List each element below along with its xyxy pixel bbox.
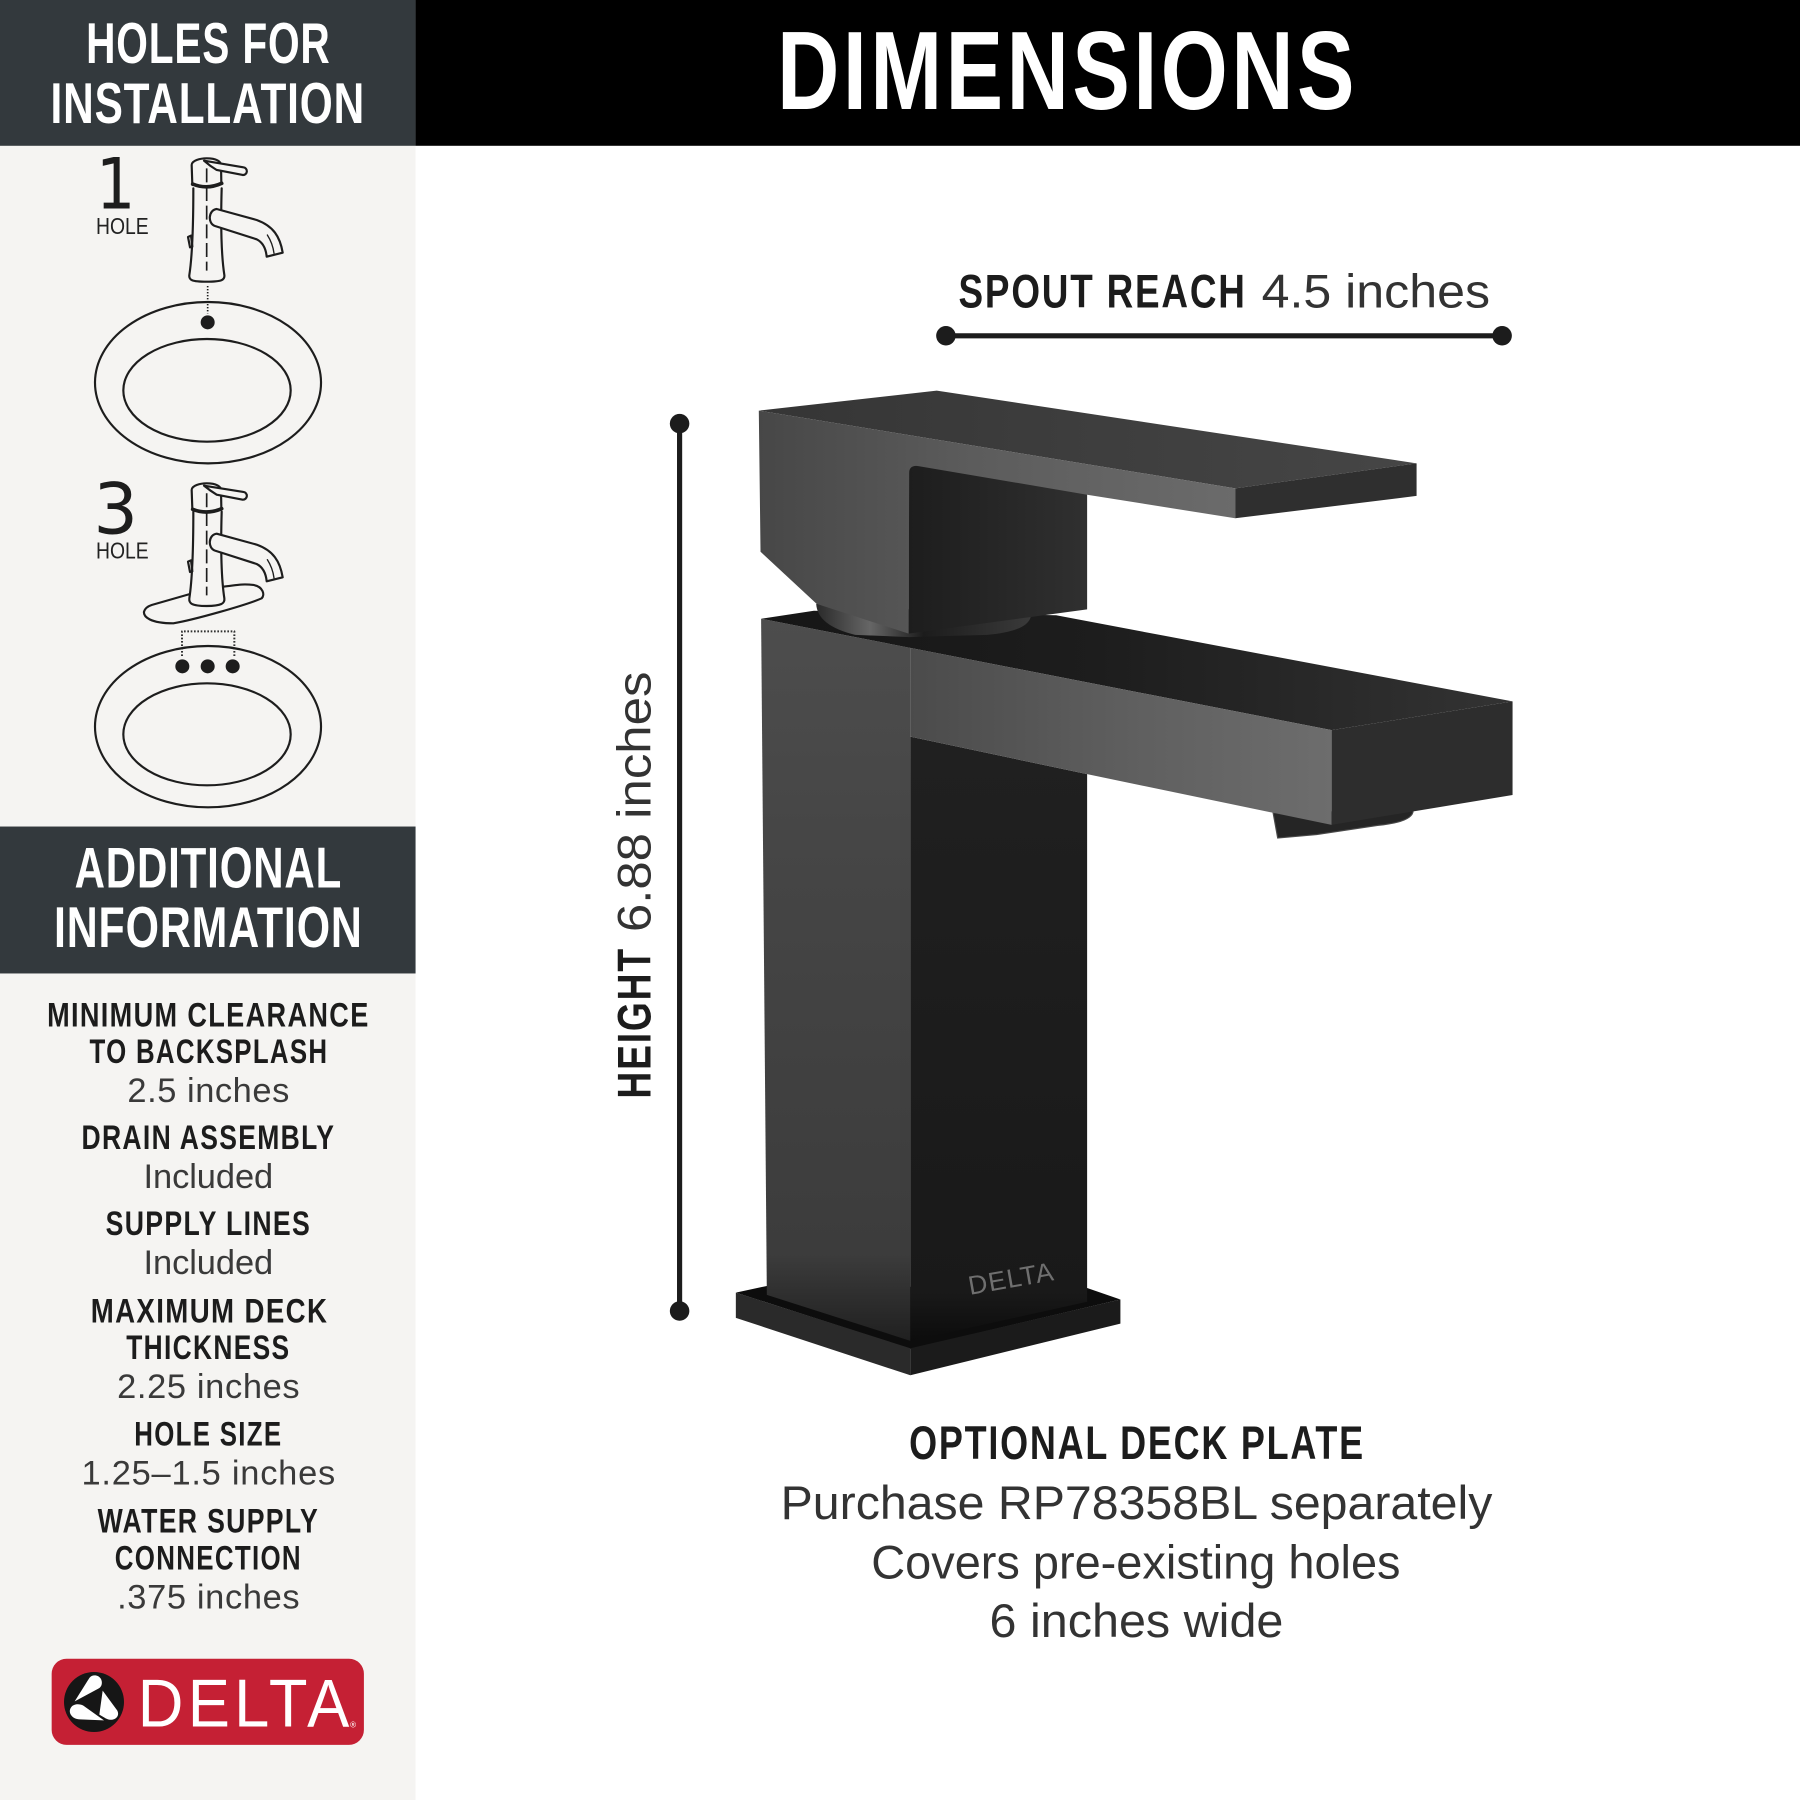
logo mark xyxy=(64,1672,124,1732)
faucet body: DELTA xyxy=(966,1256,1057,1301)
text block: optional deck plate: Purchase RP78358BL separately xyxy=(781,1476,1493,1529)
panel: left sidebar xyxy=(0,0,416,1800)
icon: three hole faucet, deck plate and sink: 3 xyxy=(93,468,138,550)
aerator xyxy=(1273,810,1413,838)
icon: three hole faucet, deck plate and sink: HOLE xyxy=(96,538,149,564)
dimension: spout reach label xyxy=(959,265,1490,318)
product: black faucet xyxy=(736,391,1513,1375)
faucet deck plate xyxy=(736,1286,1120,1375)
faucet body xyxy=(761,619,1087,1341)
title: dimensions xyxy=(416,0,1800,146)
text block: optional deck plate xyxy=(781,1416,1493,1647)
text block: minimum clearance to backsplash: MINIMUM CLEARANCE xyxy=(47,996,370,1034)
dimension: spout reach label: SPOUT REACH xyxy=(959,265,1247,318)
heading: holes for installation xyxy=(0,0,416,146)
text block: drain assembly xyxy=(82,1119,335,1196)
text block: optional deck plate: OPTIONAL DECK PLATE xyxy=(909,1416,1365,1469)
text block: minimum clearance to backsplash: TO BACKSPLASH xyxy=(90,1033,328,1071)
dimension: height label xyxy=(607,672,660,1099)
text block: supply lines: Included xyxy=(143,1244,273,1282)
heading: holes for installation: HOLES FOR xyxy=(86,12,331,76)
logo: delta xyxy=(52,1659,364,1745)
text block: drain assembly: Included xyxy=(143,1158,273,1196)
dimension: height label: HEIGHT xyxy=(607,947,660,1099)
text block: minimum clearance to backsplash: 2.5 inches xyxy=(127,1072,289,1110)
arrow: height dimension line xyxy=(670,414,689,1321)
text block: hole size xyxy=(82,1415,335,1492)
text block: maximum deck thickness: 2.25 inches xyxy=(117,1368,300,1406)
icon: one hole faucet and sink: HOLE xyxy=(96,213,149,239)
text block: maximum deck thickness: THICKNESS xyxy=(126,1329,290,1367)
faucet handle xyxy=(759,391,1417,634)
text block: hole size: HOLE SIZE xyxy=(134,1415,282,1453)
text block: supply lines: SUPPLY LINES xyxy=(106,1205,311,1243)
icon: one hole faucet and sink: 1 xyxy=(96,143,135,225)
dimension: height label: 6.88 inches xyxy=(607,672,660,932)
heading: holes for installation: INSTALLATION xyxy=(51,72,365,136)
heading: additional information: INFORMATION xyxy=(54,896,363,960)
text block: optional deck plate: 6 inches wide xyxy=(990,1594,1283,1647)
text block: minimum clearance to backsplash xyxy=(47,996,370,1110)
text block: optional deck plate: Covers pre-existing holes xyxy=(871,1535,1401,1588)
icon: one hole faucet and sink xyxy=(95,143,321,463)
arrow: spout reach dimension line xyxy=(936,326,1512,346)
text block: maximum deck thickness: MAXIMUM DECK xyxy=(91,1292,328,1330)
title: dimensions: DIMENSIONS xyxy=(777,8,1358,133)
text block: hole size: 1.25–1.5 inches xyxy=(82,1454,335,1492)
logo: delta: ® xyxy=(350,1721,356,1730)
swivel ring xyxy=(816,604,1031,637)
text block: water supply connection: .375 inches xyxy=(117,1578,300,1616)
text block: water supply connection: CONNECTION xyxy=(115,1539,302,1577)
text block: water supply connection xyxy=(98,1503,319,1616)
text block: water supply connection: WATER SUPPLY xyxy=(98,1503,319,1541)
icon: three hole faucet, deck plate and sink xyxy=(93,468,321,807)
logo: delta: DELTA xyxy=(138,1667,354,1742)
heading: additional information xyxy=(0,827,416,973)
text block: drain assembly: DRAIN ASSEMBLY xyxy=(82,1119,335,1157)
text block: supply lines xyxy=(106,1205,311,1282)
faucet spout xyxy=(761,611,1513,825)
text block: maximum deck thickness xyxy=(91,1292,328,1406)
dimension: spout reach label: 4.5 inches xyxy=(1262,265,1490,318)
heading: additional information: ADDITIONAL xyxy=(75,836,342,900)
